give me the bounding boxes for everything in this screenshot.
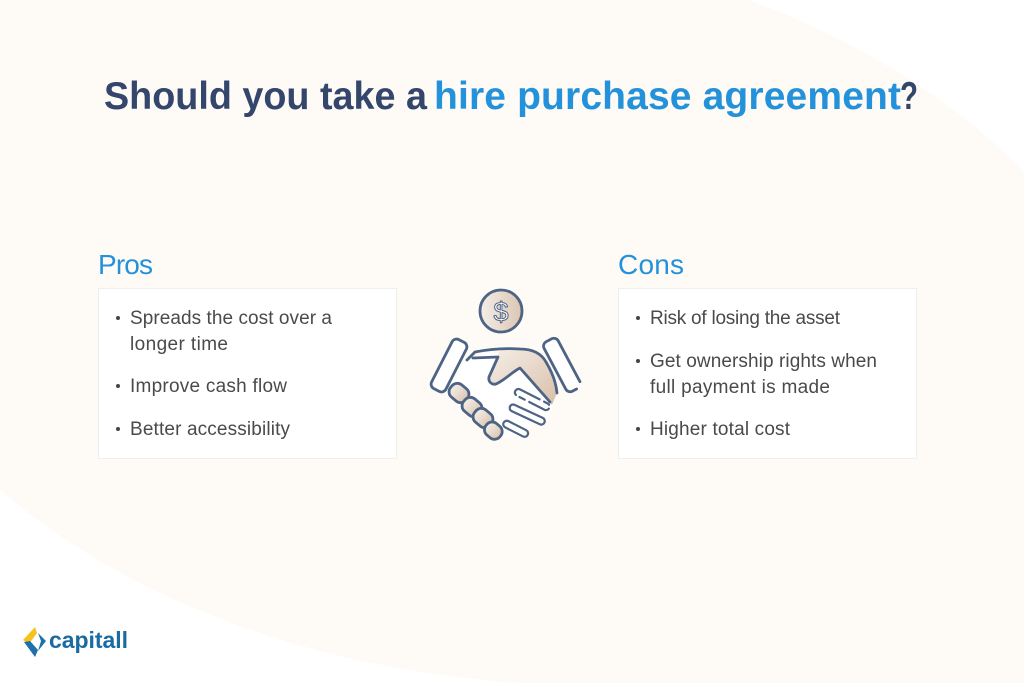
tan hand xyxy=(489,349,557,405)
logo: capitall xyxy=(23,627,128,657)
title: Should you take a xyxy=(104,75,427,118)
pros list: Better accessibility xyxy=(130,419,290,440)
left fingers xyxy=(446,380,505,442)
right cuff xyxy=(542,337,582,393)
heading: cons: Cons xyxy=(618,249,684,280)
left cuff xyxy=(429,337,469,394)
title xyxy=(104,75,918,118)
cons list: full payment is made xyxy=(650,377,830,398)
logo mark xyxy=(23,627,46,657)
cons list: Get ownership rights when xyxy=(650,351,877,372)
hand outline xyxy=(467,349,557,402)
pros list: longer time xyxy=(130,334,228,355)
cons list xyxy=(636,308,877,440)
pros list: Improve cash flow xyxy=(130,376,287,397)
icon: handshake with dollar coin xyxy=(429,290,582,442)
pros card xyxy=(98,288,396,458)
cons list: Higher total cost xyxy=(650,419,791,440)
title: ? xyxy=(900,75,918,118)
cons card xyxy=(618,288,916,458)
pros list xyxy=(116,308,332,440)
pros list: Spreads the cost over a xyxy=(130,308,332,329)
cons list: Risk of losing the asset xyxy=(650,308,841,329)
white hand xyxy=(445,352,556,440)
logo wordmark: capitall xyxy=(49,627,128,653)
panel: pros xyxy=(98,249,396,458)
title: hire purchase agreement xyxy=(434,75,901,118)
icon: dollar coin xyxy=(480,290,522,332)
heading: pros: Pros xyxy=(98,249,153,280)
icon: dollar coin: $ xyxy=(493,297,509,327)
right fingers xyxy=(502,388,551,438)
panel: cons xyxy=(618,249,916,458)
